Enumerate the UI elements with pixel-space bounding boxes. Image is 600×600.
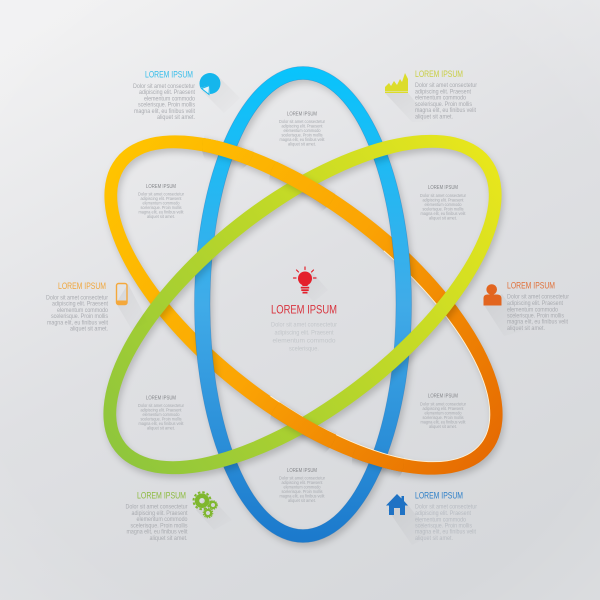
text block: top left: aliquet sit amet.	[157, 114, 195, 121]
small text: top center: Dolor sit amet consectetur	[279, 119, 325, 124]
small text: upper right: magna elit, eu finibus velit	[420, 211, 466, 216]
text block: bottom right: adipiscing elit. Praesent	[415, 510, 471, 517]
small text: lower right: LOREM IPSUM	[428, 394, 458, 400]
text block: bottom right: Dolor sit amet consectetur	[415, 504, 477, 511]
text block: right: aliquet sit amet.	[507, 325, 545, 332]
text block: top left: magna elit, eu finibus velit	[134, 108, 195, 115]
text block: top right: aliquet sit amet.	[415, 113, 453, 120]
text block: left	[46, 281, 108, 333]
small text: upper left: magna elit, eu finibus velit	[138, 210, 184, 214]
central text block: scelerisque.	[289, 346, 319, 353]
small text: top center: aliquet sit amet.	[288, 142, 316, 146]
text block: top left: Dolor sit amet consectetur	[133, 83, 195, 90]
small text: bottom center: aliquet sit amet.	[288, 498, 316, 503]
small text: top center: magna elit, eu finibus velit	[280, 137, 325, 142]
icon: pie chart	[199, 73, 240, 113]
text block: top left	[133, 70, 195, 121]
small text: upper right: LOREM IPSUM	[428, 185, 458, 191]
small text: bottom center: scelerisque. Proin mollis	[282, 489, 323, 494]
orange over green, bottom crossing	[270, 402, 336, 451]
small text: lower right: adipiscing elit. Praesent	[422, 406, 464, 411]
text block: right: LOREM IPSUM	[507, 280, 555, 290]
text block: left: elementum commodo	[57, 307, 108, 314]
icon: light bulb	[294, 267, 328, 302]
icon: house	[386, 494, 432, 545]
small text: upper left: adipiscing elit. Praesent	[140, 196, 182, 201]
central text block: LOREM IPSUM	[271, 302, 337, 316]
small text: upper right: elementum commodo	[424, 202, 462, 207]
text block: top right: adipiscing elit. Praesent	[415, 88, 471, 95]
text block: top right: scelerisque. Proin mollis	[415, 101, 472, 108]
text block: top left: LOREM IPSUM	[145, 70, 193, 80]
text block: top right	[415, 69, 477, 120]
text block: top right: magna elit, eu finibus velit	[415, 107, 476, 114]
text block: bottom left: magna elit, eu finibus velit	[126, 529, 188, 536]
text block: bottom right: LOREM IPSUM	[415, 490, 463, 500]
text block: top right: LOREM IPSUM	[415, 69, 463, 79]
small text: lower left: scelerisque. Proin mollis	[140, 416, 182, 422]
small text: lower left: magna elit, eu finibus velit	[138, 421, 184, 426]
central text block: elementum commodo	[272, 338, 336, 344]
small text: upper left: Dolor sit amet consectetur	[138, 192, 184, 196]
text block: right: adipiscing elit. Praesent	[507, 300, 563, 307]
small text: upper right	[420, 185, 466, 220]
central text block: adipiscing elit. Praesent	[274, 330, 334, 336]
small text: upper right: aliquet sit amet.	[429, 216, 457, 220]
small text: lower right	[420, 394, 466, 429]
text block: top right: Dolor sit amet consectetur	[415, 82, 477, 89]
small text: upper left: elementum commodo	[142, 200, 180, 206]
icon: area chart	[385, 73, 432, 122]
small text: lower left: LOREM IPSUM	[146, 396, 176, 402]
text block: left: aliquet sit amet.	[70, 326, 108, 333]
central text block	[271, 302, 338, 353]
text block: right: Dolor sit amet consectetur	[507, 294, 569, 301]
text block: bottom left: Dolor sit amet consectetur	[126, 504, 188, 511]
orange over green, top crossing	[270, 162, 335, 210]
small text: upper left: LOREM IPSUM	[146, 184, 176, 190]
small text: lower left: Dolor sit amet consectetur	[138, 403, 184, 408]
text block: right: scelerisque. Proin mollis	[507, 312, 564, 320]
orange over blue, bottom-right crossing	[352, 444, 404, 476]
green ring	[48, 72, 559, 541]
small text: bottom center: magna elit, eu finibus velit	[280, 494, 325, 498]
text block: left: magna elit, eu finibus velit	[47, 319, 108, 326]
small text: lower right: aliquet sit amet.	[429, 424, 457, 429]
small text: lower left	[138, 396, 184, 430]
small text: top center: elementum commodo	[284, 128, 321, 133]
text block: bottom left: aliquet sit amet.	[150, 535, 188, 542]
small text: bottom center: adipiscing elit. Praesent	[282, 480, 323, 485]
text block: top left: scelerisque. Proin mollis	[138, 102, 195, 109]
small text: upper left: scelerisque. Proin mollis	[140, 205, 182, 210]
small text: upper right: scelerisque. Proin mollis	[422, 206, 464, 212]
small text: top center: LOREM IPSUM	[287, 112, 317, 118]
small text: bottom center: elementum commodo	[284, 484, 321, 490]
icon: smartphone	[116, 284, 148, 330]
small text: lower right: magna elit, eu finibus velit	[420, 420, 466, 424]
text block: right: elementum commodo	[507, 306, 558, 313]
icon: person	[484, 284, 528, 336]
small text: top center	[279, 112, 325, 146]
text block: left: Dolor sit amet consectetur	[46, 294, 108, 301]
small text: lower left: aliquet sit amet.	[147, 426, 175, 430]
text block: bottom left: scelerisque. Proin mollis	[130, 522, 188, 529]
small text: bottom center: LOREM IPSUM	[287, 468, 317, 474]
small text: bottom center	[279, 468, 325, 503]
small text: top center: adipiscing elit. Praesent	[282, 124, 323, 128]
text block: bottom right: magna elit, eu finibus velit	[415, 529, 476, 536]
central text block: Dolor sit amet consectetur	[271, 322, 338, 329]
text block: bottom right: elementum commodo	[415, 516, 466, 523]
text block: right	[507, 280, 569, 332]
small text: top center: scelerisque. Proin mollis	[282, 132, 323, 138]
small text: upper left: aliquet sit amet.	[147, 214, 175, 219]
text block: bottom left: adipiscing elit. Praesent	[132, 510, 188, 517]
blue ring	[194, 66, 414, 546]
text block: bottom right: aliquet sit amet.	[415, 535, 453, 542]
text block: right: magna elit, eu finibus velit	[507, 319, 568, 326]
small text: bottom center: Dolor sit amet consectetur	[279, 476, 325, 480]
text block: bottom right	[415, 490, 477, 542]
orange over blue, top-left crossing	[202, 138, 254, 168]
text block: left: adipiscing elit. Praesent	[52, 300, 108, 308]
icon: gears	[194, 492, 232, 530]
text block: top left: adipiscing elit. Praesent	[139, 89, 195, 96]
small text: lower right: Dolor sit amet consectetur	[420, 402, 466, 406]
text block: top right: elementum commodo	[415, 94, 466, 102]
text block: bottom left: elementum commodo	[136, 516, 188, 523]
small text: lower left: adipiscing elit. Praesent	[140, 408, 182, 412]
text block: bottom right: scelerisque. Proin mollis	[415, 522, 472, 529]
small text: lower left: elementum commodo	[142, 412, 180, 417]
small text: upper left	[138, 184, 184, 219]
small text: upper right: Dolor sit amet consectetur	[420, 193, 466, 198]
text block: bottom left: LOREM IPSUM	[137, 490, 186, 500]
small text: lower right: scelerisque. Proin mollis	[422, 415, 464, 420]
orange ring	[104, 135, 507, 482]
small text: lower right: elementum commodo	[424, 410, 462, 416]
text block: top left: elementum commodo	[144, 96, 195, 102]
text block: left: scelerisque. Proin mollis	[51, 313, 108, 320]
text block: left: LOREM IPSUM	[58, 281, 106, 291]
text block: bottom left	[126, 490, 188, 542]
small text: upper right: adipiscing elit. Praesent	[422, 198, 464, 202]
